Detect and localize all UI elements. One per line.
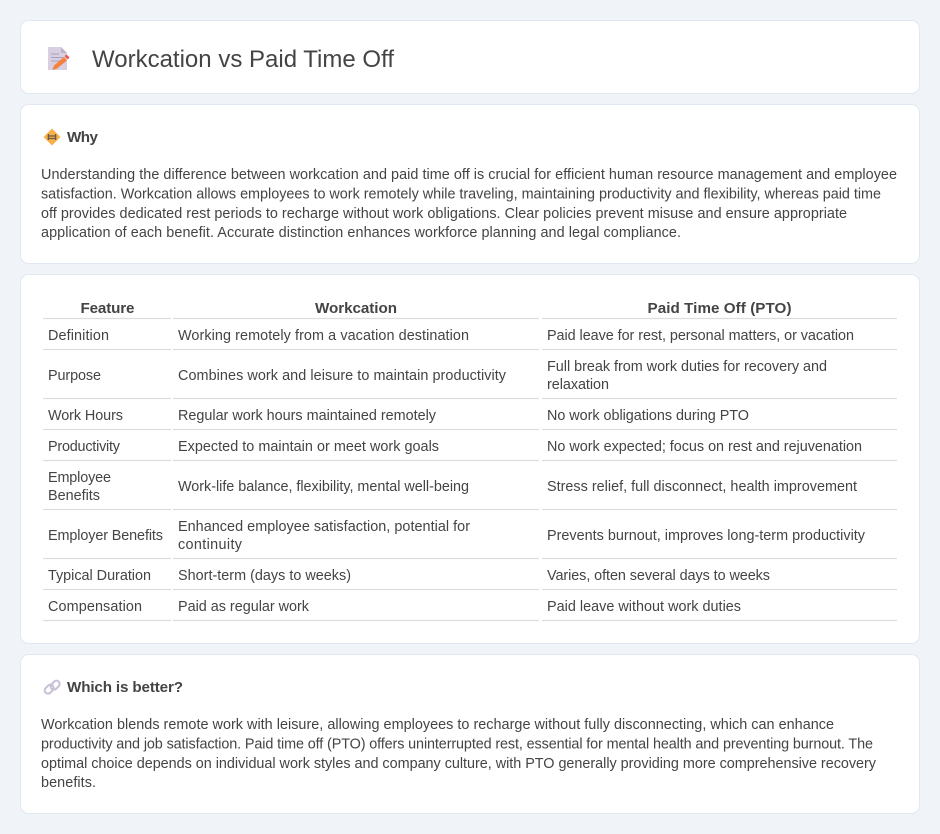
table row: definition: Definition [48, 328, 109, 344]
table row: typical duration: Typical Duration [48, 568, 151, 584]
panel: comparison table [20, 274, 920, 644]
table row: work hours: No work obligations during PTO [547, 408, 749, 424]
heading: which is better: Which is better? [67, 679, 183, 696]
table row: compensation: Paid as regular work [178, 599, 310, 615]
text block: which is better: benefits. [41, 775, 96, 791]
table row: typical duration [48, 568, 770, 584]
table row: definition [48, 328, 854, 344]
text block: why: Understanding the difference between workcation and paid time off is crucial for efficient human resource management and employee [41, 167, 897, 183]
table row: employee benefits [48, 470, 857, 504]
table row: employee benefits: Work-life balance, flexibility, mental well-being [178, 479, 469, 495]
table row: purpose: Combines work and leisure to maintain productivity [178, 368, 507, 384]
table row: compensation: Paid leave without work duties [547, 599, 741, 615]
table row: purpose [48, 359, 827, 393]
text block: why: application of each benefit. Accurate distinction enhances workforce planning and legal compliance. [41, 225, 681, 241]
table row: purpose: relaxation [547, 377, 609, 393]
text block: which is better: Workcation blends remote work with leisure, allowing employees to recharge without fully disconnecting, which can enhance [41, 717, 834, 733]
table row: typical duration: Short-term (days to weeks) [178, 568, 351, 584]
title: Workcation vs Paid Time Off [92, 46, 394, 73]
icon: memo with pencil [48, 47, 70, 70]
table row: employee benefits: Stress relief, full disconnect, health improvement [547, 479, 857, 495]
table row: employer benefits [48, 519, 866, 553]
table row: employer benefits: Employer Benefits [48, 528, 163, 544]
panel: header [20, 20, 920, 94]
table header: Feature [80, 300, 134, 317]
table row: definition: Paid leave for rest, personal matters, or vacation [547, 328, 854, 344]
table row: employee benefits: Employee [48, 470, 111, 486]
panel: which is better [20, 654, 920, 814]
heading: why: Why [67, 129, 99, 146]
table row: employer benefits: Prevents burnout, improves long-term productivity [547, 528, 866, 544]
table row: employee benefits: Benefits [48, 488, 100, 504]
table header: Paid Time Off (PTO) [648, 300, 792, 317]
table row: employer benefits: continuity [178, 537, 243, 553]
text block: which is better: optimal choice depends on individual work styles and company culture, with PTO generally providing more comprehensive recovery [41, 756, 877, 772]
table row: productivity: Productivity [48, 439, 121, 455]
table row: compensation [48, 599, 741, 615]
panel: why [20, 104, 920, 264]
table row: purpose: Purpose [48, 368, 101, 384]
table row: productivity: Expected to maintain or meet work goals [178, 439, 439, 455]
table row: definition: Working remotely from a vacation destination [178, 328, 469, 344]
text block: which is better [41, 717, 877, 791]
text block: why: off provides dedicated rest periods to recharge without work obligations. Clear policies prevent misuse and ensure appropriate [41, 206, 847, 222]
text block: why: satisfaction. Workcation allows employees to work remotely while traveling, maintaining productivity and flexibility, whereas paid time [41, 186, 881, 202]
table row: productivity [48, 439, 862, 455]
table row: employer benefits: Enhanced employee satisfaction, potential for [178, 519, 470, 535]
table row: work hours: Regular work hours maintained remotely [178, 408, 437, 424]
table header: Workcation [315, 300, 397, 317]
text block: which is better: productivity and job satisfaction. Paid time off (PTO) offers uninterrupted rest, essential for mental health and preventing burnout. The [41, 736, 873, 752]
table row: typical duration: Varies, often several days to weeks [547, 568, 770, 584]
table row: purpose: Full break from work duties for recovery and [547, 359, 827, 375]
icon: construction sign [44, 128, 60, 146]
table row: work hours [48, 408, 749, 424]
icon: link [43, 679, 61, 695]
table row: compensation: Compensation [48, 599, 142, 615]
text block: why [41, 167, 897, 241]
table row: work hours: Work Hours [48, 408, 123, 424]
table row: productivity: No work expected; focus on rest and rejuvenation [547, 439, 862, 455]
table header [80, 300, 792, 317]
